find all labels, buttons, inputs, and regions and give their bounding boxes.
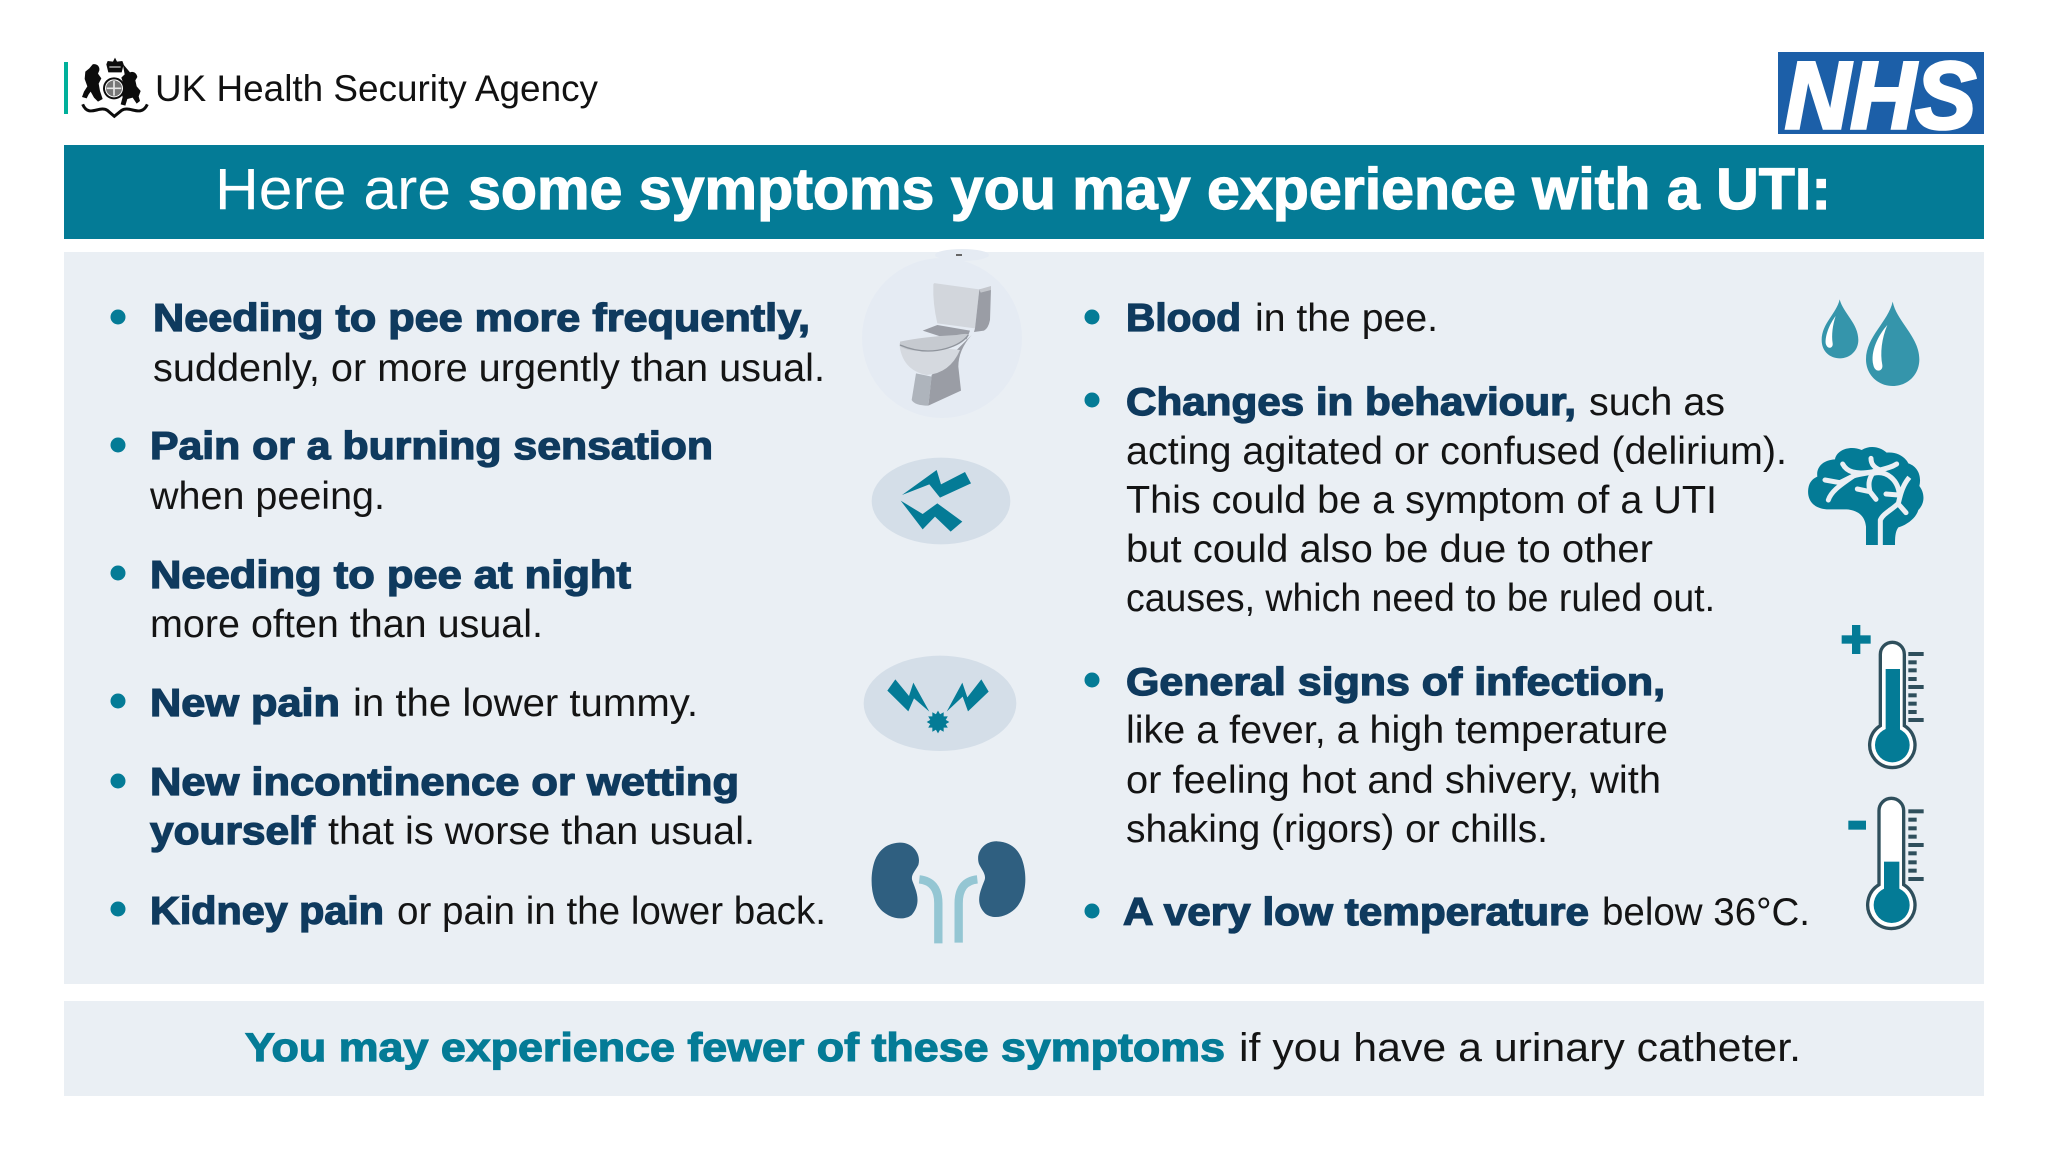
icon: low temperature thermometer	[1848, 798, 1924, 929]
symptom: changes in behaviour: Changes in behaviour,	[1126, 381, 1576, 424]
icon: brain	[1808, 447, 1923, 547]
symptom: kidney pain: Kidney pain	[150, 890, 384, 933]
panel: left symptom list	[110, 297, 826, 933]
logo: NHS: NHS	[1785, 43, 1976, 149]
symptom: kidney pain: or pain in the lower back.	[397, 890, 826, 933]
symptom: lower tummy pain: New pain	[150, 682, 340, 725]
panel: symptoms	[64, 252, 1984, 984]
logo: UK Health Security Agency	[64, 58, 598, 116]
panel: catheter note	[64, 1001, 1984, 1096]
symptom: incontinence	[110, 761, 755, 853]
symptom: kidney pain	[110, 890, 826, 933]
symptom: lower tummy pain: in the lower tummy.	[353, 682, 698, 725]
symptom: general signs of infection: like a fever, a high temperature	[1126, 709, 1668, 752]
symptom: burning sensation: Pain or a burning sensation	[150, 425, 713, 468]
title banner: Here are	[215, 157, 451, 222]
symptom: changes in behaviour: but could also be due to other	[1126, 528, 1653, 571]
icon: high temperature thermometer	[1842, 625, 1924, 768]
symptom: incontinence: New incontinence or wetting	[150, 761, 739, 804]
symptom: changes in behaviour: causes, which need to be ruled out.	[1126, 577, 1715, 620]
symptom: peeing at night	[110, 554, 631, 646]
symptom: blood in pee: Blood	[1126, 297, 1241, 340]
symptom: lower tummy pain	[110, 682, 698, 725]
symptom: burning sensation: when peeing.	[149, 475, 385, 518]
symptom: peeing at night: Needing to pee at night	[150, 554, 631, 597]
symptom: changes in behaviour: such as	[1589, 381, 1725, 424]
symptom: frequent peeing	[110, 297, 825, 390]
icon: blood drops	[1822, 299, 1919, 386]
symptom: incontinence: that is worse than usual.	[328, 810, 755, 853]
symptom: general signs of infection: or feeling hot and shivery, with	[1126, 759, 1661, 802]
symptom: very low temperature: below 36°C.	[1602, 891, 1810, 934]
symptom: burning sensation	[110, 425, 713, 518]
icon: toilet	[862, 249, 1022, 418]
panel: catheter note: if you have a urinary catheter.	[1239, 1026, 1801, 1070]
symptom: changes in behaviour: acting agitated or confused (delirium).	[1126, 430, 1787, 473]
symptom: changes in behaviour: This could be a symptom of a UTI	[1126, 479, 1717, 522]
symptom: general signs of infection	[1084, 661, 1668, 851]
icon: burning pain	[872, 458, 1010, 544]
symptom: blood in pee	[1084, 297, 1438, 340]
logo wordmark: UK Health Security Agency	[155, 68, 598, 109]
symptom: changes in behaviour	[1084, 381, 1787, 620]
symptom: very low temperature: A very low temperature	[1123, 891, 1589, 934]
title banner	[64, 145, 1984, 239]
title banner: some symptoms you may experience with a UTI:	[468, 157, 1831, 222]
symptom: blood in pee: in the pee.	[1255, 297, 1438, 340]
icon: lower tummy pain	[864, 656, 1016, 751]
symptom: general signs of infection: shaking (rigors) or chills.	[1126, 808, 1548, 851]
symptom: general signs of infection: General signs of infection,	[1126, 661, 1665, 704]
symptom: peeing at night: more often than usual.	[150, 603, 543, 646]
symptom: frequent peeing: Needing to pee more frequently,	[153, 297, 810, 340]
symptom: frequent peeing: suddenly, or more urgently than usual.	[153, 347, 825, 390]
symptom: very low temperature	[1084, 891, 1810, 934]
panel: right symptom list	[1084, 297, 1810, 934]
symptom: incontinence: yourself	[150, 810, 315, 853]
panel: catheter note: You may experience fewer of these symptoms	[245, 1026, 1225, 1070]
icon: royal crest	[82, 58, 147, 116]
icon: kidneys	[872, 841, 1025, 943]
